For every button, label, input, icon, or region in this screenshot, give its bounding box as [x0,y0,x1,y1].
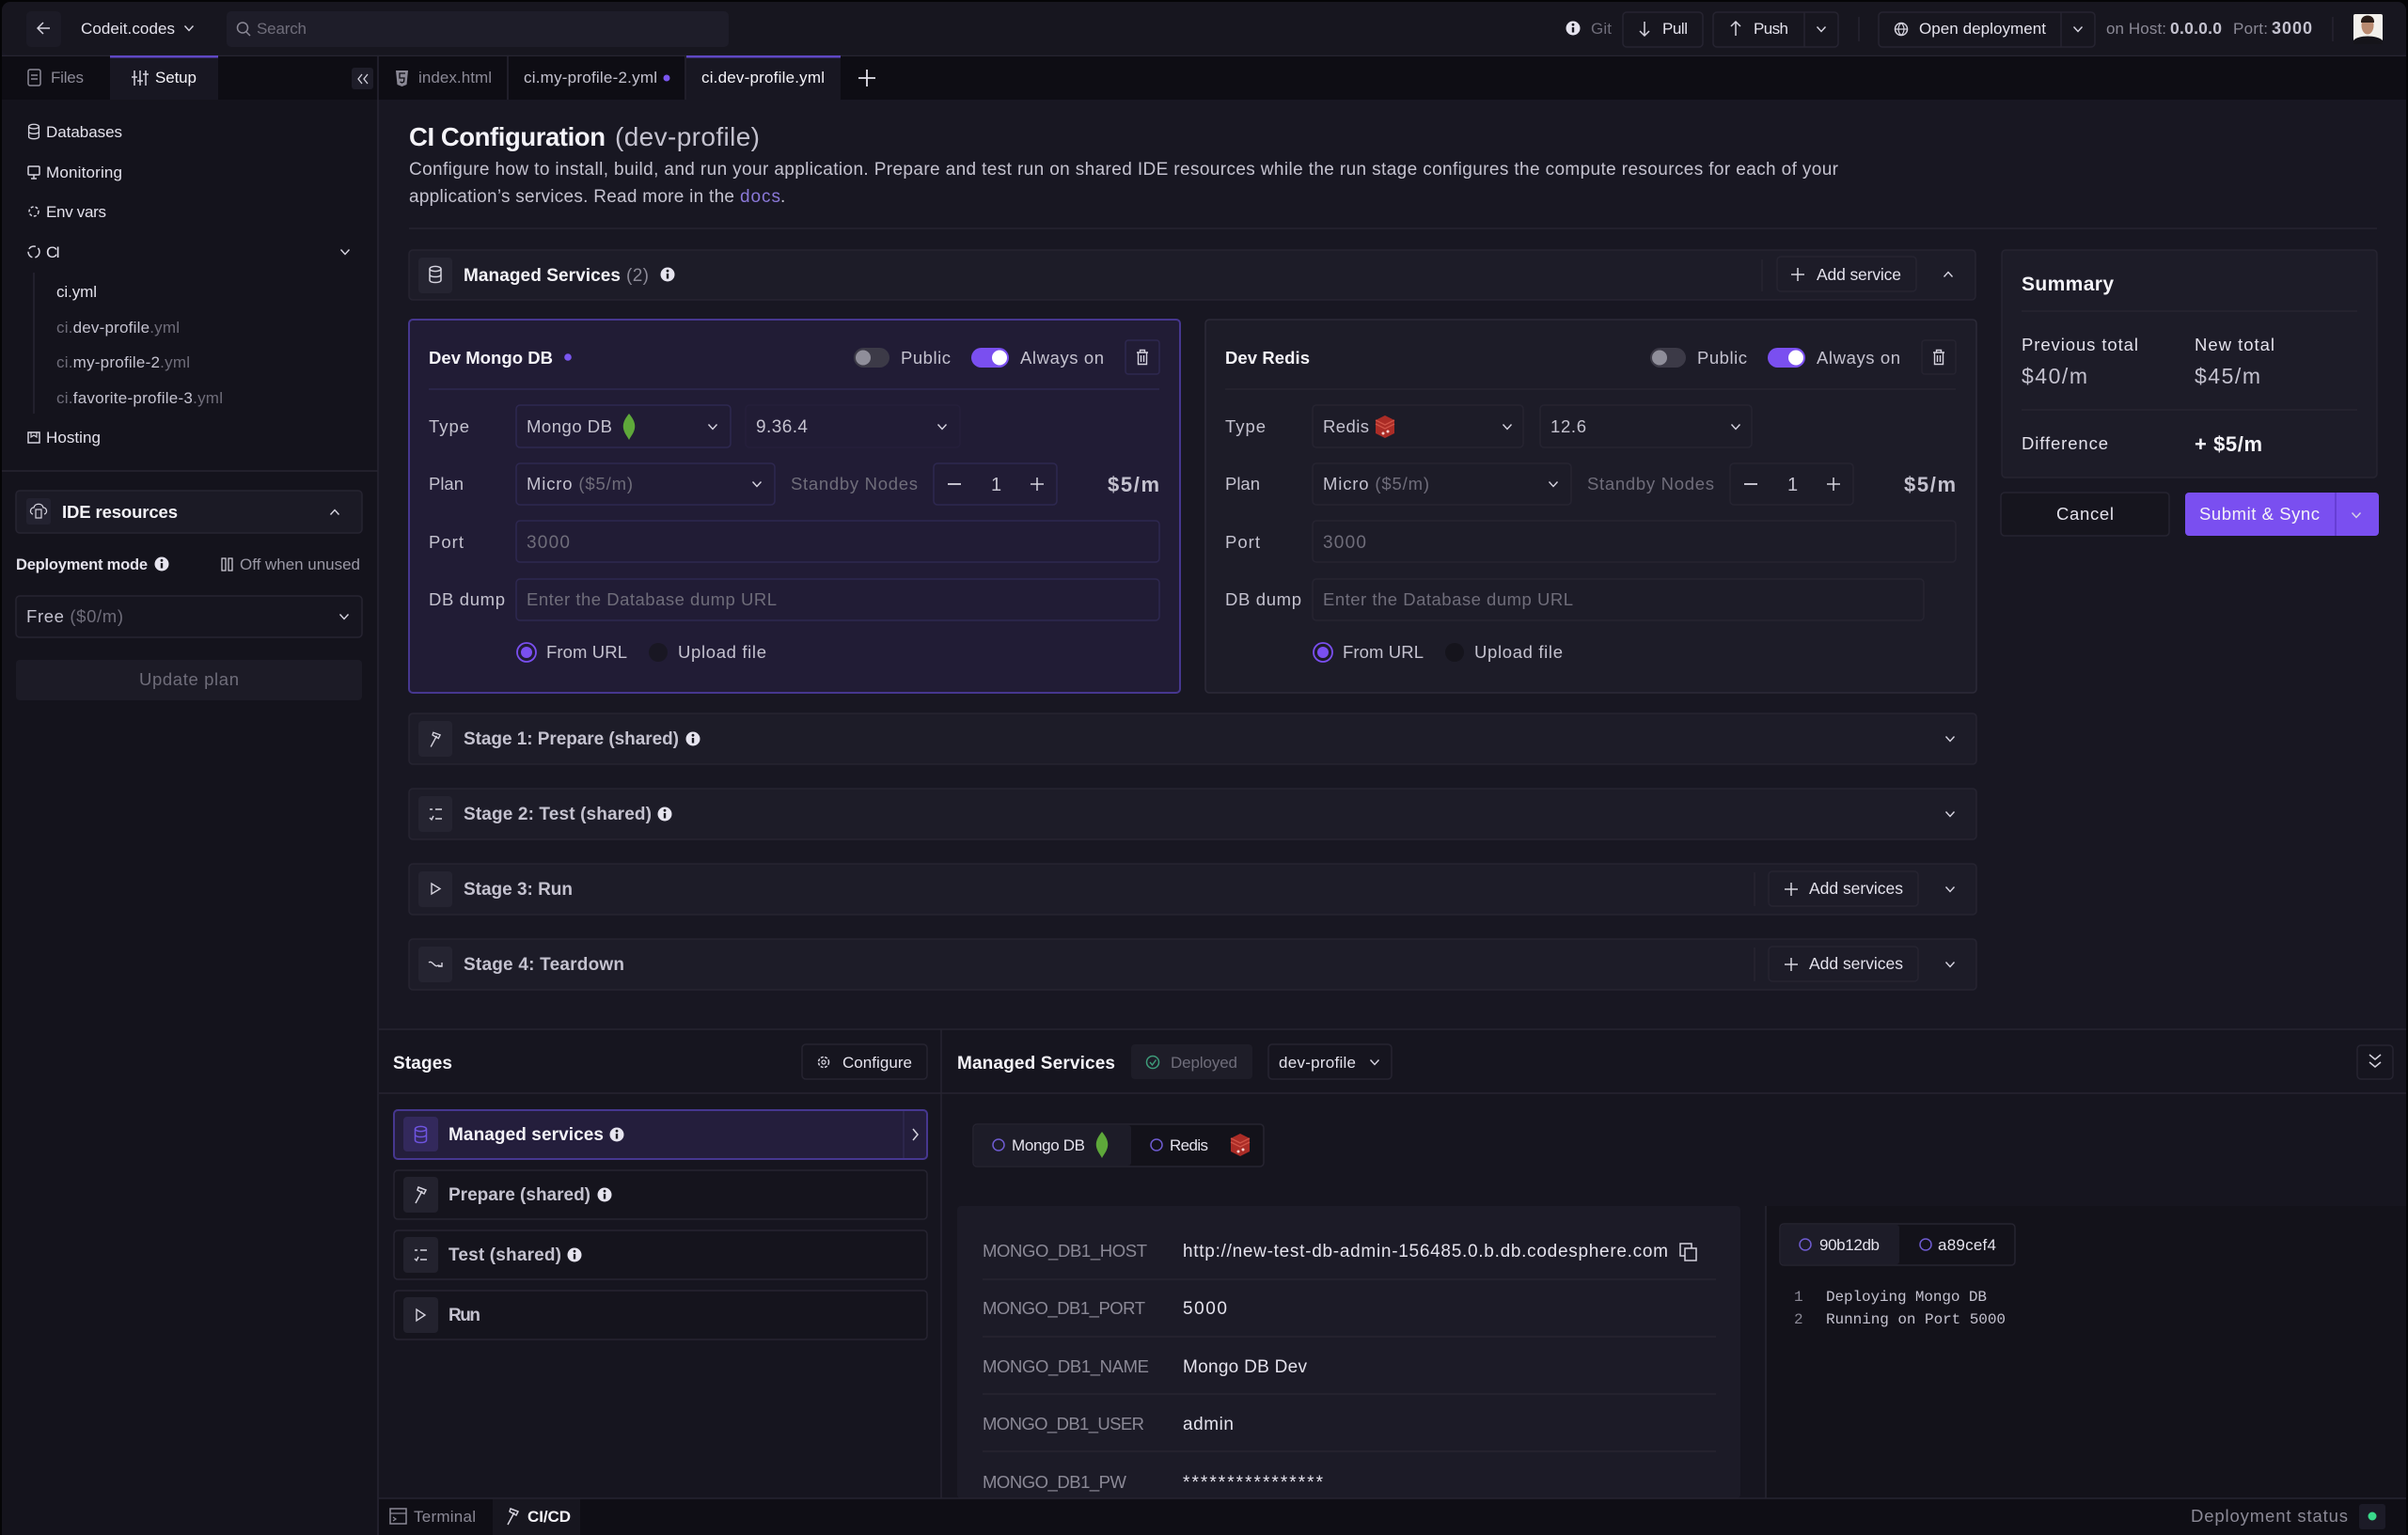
delete button [1125,340,1159,374]
plan row: 1 [1787,475,1798,495]
source radios: From URL [546,642,627,662]
plan row [1225,463,1956,505]
stage 2 row: Stage 2: Test (shared) [464,805,652,824]
icon: add tab [858,70,875,86]
managed services header: Managed Services [464,266,621,286]
open deployment button [1879,12,2095,47]
port row [1225,521,1956,562]
stage item: managed services active: Managed services [449,1125,604,1145]
nav: ci.my-profile-2.yml: ci.my-profile-2.yml [56,353,190,371]
ide resources header: IDE resources [62,502,178,522]
description: application’s services. Read more in the [409,187,734,207]
log output: Deploying Mongo DB [1826,1289,1987,1306]
add services button [1769,871,1918,906]
type row: 12.6 [1550,416,1586,436]
panel: summary: Previous total [2022,335,2138,354]
host and port [2106,19,2312,38]
row: host: MONGO_DB1_HOST [983,1241,1147,1261]
panel: dev redis card: Dev Redis [1225,348,1310,368]
tab: ci.dev-profile.yml active [686,55,841,100]
add service button [1777,257,1916,291]
nav: ci.favorite-profile-3.yml: ci.favorite-profile-3.yml [56,389,223,407]
always on toggle [1768,348,1900,368]
cancel button [2001,493,2169,536]
git label: Git [1591,20,1612,38]
stage 3 row: Stage 3: Run [464,880,573,900]
tab: setup active [110,55,218,100]
stage item: test [394,1230,927,1279]
description: docs [740,187,780,207]
push button [1713,12,1838,47]
managed services header [409,250,1975,300]
panel: summary: Summary [2022,274,2114,295]
log output [1794,1289,2006,1328]
plan select: Free ($0/m) [26,606,123,626]
profile select [1268,1044,1392,1079]
project selector: Codeit.codes [81,20,175,38]
plan row: $5/m [1108,473,1159,496]
panel: summary: $45/m [2195,364,2260,388]
configure button [802,1044,927,1079]
delete button [1922,340,1956,374]
type row [429,405,960,447]
managed services header: (2) [626,266,649,286]
nav: ci.dev-profile.yml: ci.dev-profile.yml [56,319,180,337]
plan row [429,463,1159,505]
panel: deployment logs [1766,1206,2406,1498]
open deployment button: Open deployment [1919,20,2046,38]
plan row: $5/m [1904,473,1956,496]
service tabs [973,1124,1264,1167]
deployment mode row [16,556,360,573]
plan row: Plan [1225,474,1260,493]
panel: summary: New total [2195,335,2274,354]
submit and sync button: Submit & Sync [2199,504,2320,524]
port row: Port [429,532,464,552]
add services button [1769,947,1918,981]
profile select: dev-profile [1279,1054,1356,1072]
tab bar background [2,56,2406,100]
stages panel [393,1044,927,1339]
add services button: Add services [1809,879,1903,898]
db dump row: Enter the Database dump URL [1323,589,1573,609]
always on toggle [971,348,1104,368]
submit and sync button [2185,493,2379,536]
row: password: MONGO_DB1_PW [983,1472,1127,1493]
type row: 9.36.4 [756,417,808,437]
panel: dev mongo db card [409,320,1180,693]
nav: env vars: Env vars [46,203,106,221]
description: Configure how to install, build, and run your application. Prepare and test run on shared IDE resources while the run stage configures the compute resources for each of your [409,160,1839,180]
tab: ci/cd active [493,1499,580,1535]
stage item: managed services active [394,1110,927,1159]
commit tabs: a89cef4 [1938,1236,1996,1254]
panel: dev redis card [1205,320,1976,693]
row: host: http://new-test-db-admin-156485.0.b.db.codesphere.com [1183,1242,1668,1261]
stage 4 row [409,939,1976,990]
deployment status: Deployment status [2191,1506,2348,1526]
managed services panel header [957,1044,2393,1079]
port row [429,521,1159,562]
tab: terminal: Terminal [414,1508,476,1526]
row: name [983,1356,1307,1377]
configure button: Configure [842,1054,912,1072]
git label [1566,20,1612,38]
row: port: MONGO_DB1_PORT [983,1298,1145,1319]
bottom status bar [379,1498,2406,1535]
plan row: Standby Nodes [1587,474,1714,493]
row: user: MONGO_DB1_USER [983,1414,1144,1434]
managed services panel header: Managed Services [957,1054,1115,1073]
add services button: Add services [1809,954,1903,973]
panel: summary: $40/m [2022,364,2087,388]
panel: environment variables [957,1206,1740,1498]
host and port: 3000 [2272,19,2312,38]
log output: 1 [1794,1289,1803,1306]
plan row: Standby Nodes [791,474,918,493]
deployed status badge: Deployed [1171,1054,1237,1072]
deployment mode row: Off when unused [240,556,360,573]
stage item: test: Test (shared) [449,1245,561,1265]
service tabs: Redis [1170,1136,1208,1154]
tab: ci.dev-profile.yml active: ci.dev-profile.yml [701,69,825,86]
plan row: 1 [991,475,1001,495]
commit tabs: 90b12db [1819,1236,1880,1254]
public toggle [854,348,951,368]
source radios [517,642,766,662]
row: user [983,1414,1234,1434]
db dump row [429,579,1159,620]
search box: Search [257,20,307,38]
nav: ci [28,243,350,261]
row: name: MONGO_DB1_NAME [983,1356,1149,1377]
page title suffix: (dev-profile) [615,122,760,151]
icon: back arrow [26,11,61,47]
stage 4 row: Stage 4: Teardown [464,955,624,975]
public toggle: Public [901,348,951,368]
db dump row: Enter the Database dump URL [527,589,777,609]
source radios: Upload file [1474,642,1563,662]
deployment mode row: Deployment mode [16,556,148,573]
panel: summary [2002,250,2377,478]
host and port: on Host: [2106,20,2166,38]
stage 3 row [409,864,1976,915]
port row: 3000 [1323,533,1366,553]
host and port: 0.0.0.0 [2170,19,2222,38]
db dump row [1225,579,1924,620]
deployment status [2191,1504,2385,1529]
update plan button [16,660,362,700]
cancel button: Cancel [2056,504,2114,524]
sidebar [2,55,378,1535]
deployed status badge [1131,1044,1252,1079]
log output: 2 [1794,1311,1803,1328]
nav: monitoring: Monitoring [46,164,122,181]
port row: 3000 [527,533,570,553]
panel: bottom section background [379,1029,2406,1498]
plan row: Micro ($5/m) [1323,474,1429,493]
pull button: Pull [1662,20,1688,38]
row: port: 5000 [1183,1299,1227,1319]
plan row: Micro ($5/m) [527,474,633,493]
tab: ci/cd active: CI/CD [527,1508,571,1526]
row: host [983,1241,1696,1261]
public toggle: Public [1697,348,1747,368]
service tabs: Mongo DB [1012,1136,1085,1154]
type row: Redis [1323,416,1369,436]
top bar [2,2,2406,56]
stage item: prepare: Prepare (shared) [449,1185,590,1205]
always on toggle: Always on [1020,348,1104,368]
row: port [983,1298,1227,1319]
editor tabs [396,55,875,100]
description [409,160,1839,207]
page title: CI Configuration [409,122,606,151]
stage item: prepare [394,1170,927,1219]
log output: Running on Port 5000 [1826,1311,2006,1328]
type row: Type [429,416,469,436]
type row: Mongo DB [527,416,612,436]
push button: Push [1754,20,1788,38]
collapse button [352,68,373,89]
nav: hosting: Hosting [46,429,101,446]
row: user: admin [1183,1415,1234,1434]
source radios: Upload file [678,642,766,662]
tab: files [28,69,84,86]
tab: ci.my-profile-2.yml: ci.my-profile-2.yml [524,69,657,86]
stages panel: Stages [393,1054,452,1073]
row: password: **************** [1183,1473,1324,1493]
row: password [983,1472,1324,1493]
nav: ci.yml: ci.yml [56,283,97,301]
collapse panel button [2357,1045,2393,1079]
stage item: run [394,1291,927,1339]
nav: databases: Databases [46,123,122,141]
stage item: run: Run [449,1306,480,1325]
stage 1 row: Stage 1: Prepare (shared) [464,729,679,749]
panel: summary: + $5/m [2195,432,2262,456]
search box [227,11,729,47]
public toggle [1650,348,1747,368]
stage 2 row [409,789,1976,839]
source radios: From URL [1343,642,1424,662]
db dump row: DB dump [429,589,505,609]
stage 1 row [409,713,1976,764]
plan row: Plan [429,474,464,493]
update plan button: Update plan [139,669,239,689]
panel: dev mongo db card: Dev Mongo DB [429,348,553,368]
port row: Port [1225,532,1260,552]
type row [1225,405,1752,447]
row: name: Mongo DB Dev [1183,1357,1307,1377]
tab: setup active: Setup [155,69,197,86]
panel: summary: Difference [2022,433,2108,453]
db dump row: DB dump [1225,589,1301,609]
always on toggle: Always on [1817,348,1900,368]
nav: ci: CI [46,243,60,261]
pull button [1623,12,1703,47]
ide resources header [16,491,362,533]
tab: files: Files [51,69,84,86]
commit tabs [1780,1224,2015,1265]
add service button: Add service [1817,265,1901,284]
tab: index.html: index.html [418,69,492,86]
type row: Type [1225,416,1266,436]
plan select [16,596,362,637]
avatar [2353,14,2383,44]
source radios [1314,642,1563,662]
host and port: Port: [2233,20,2268,38]
description: . [780,187,785,207]
